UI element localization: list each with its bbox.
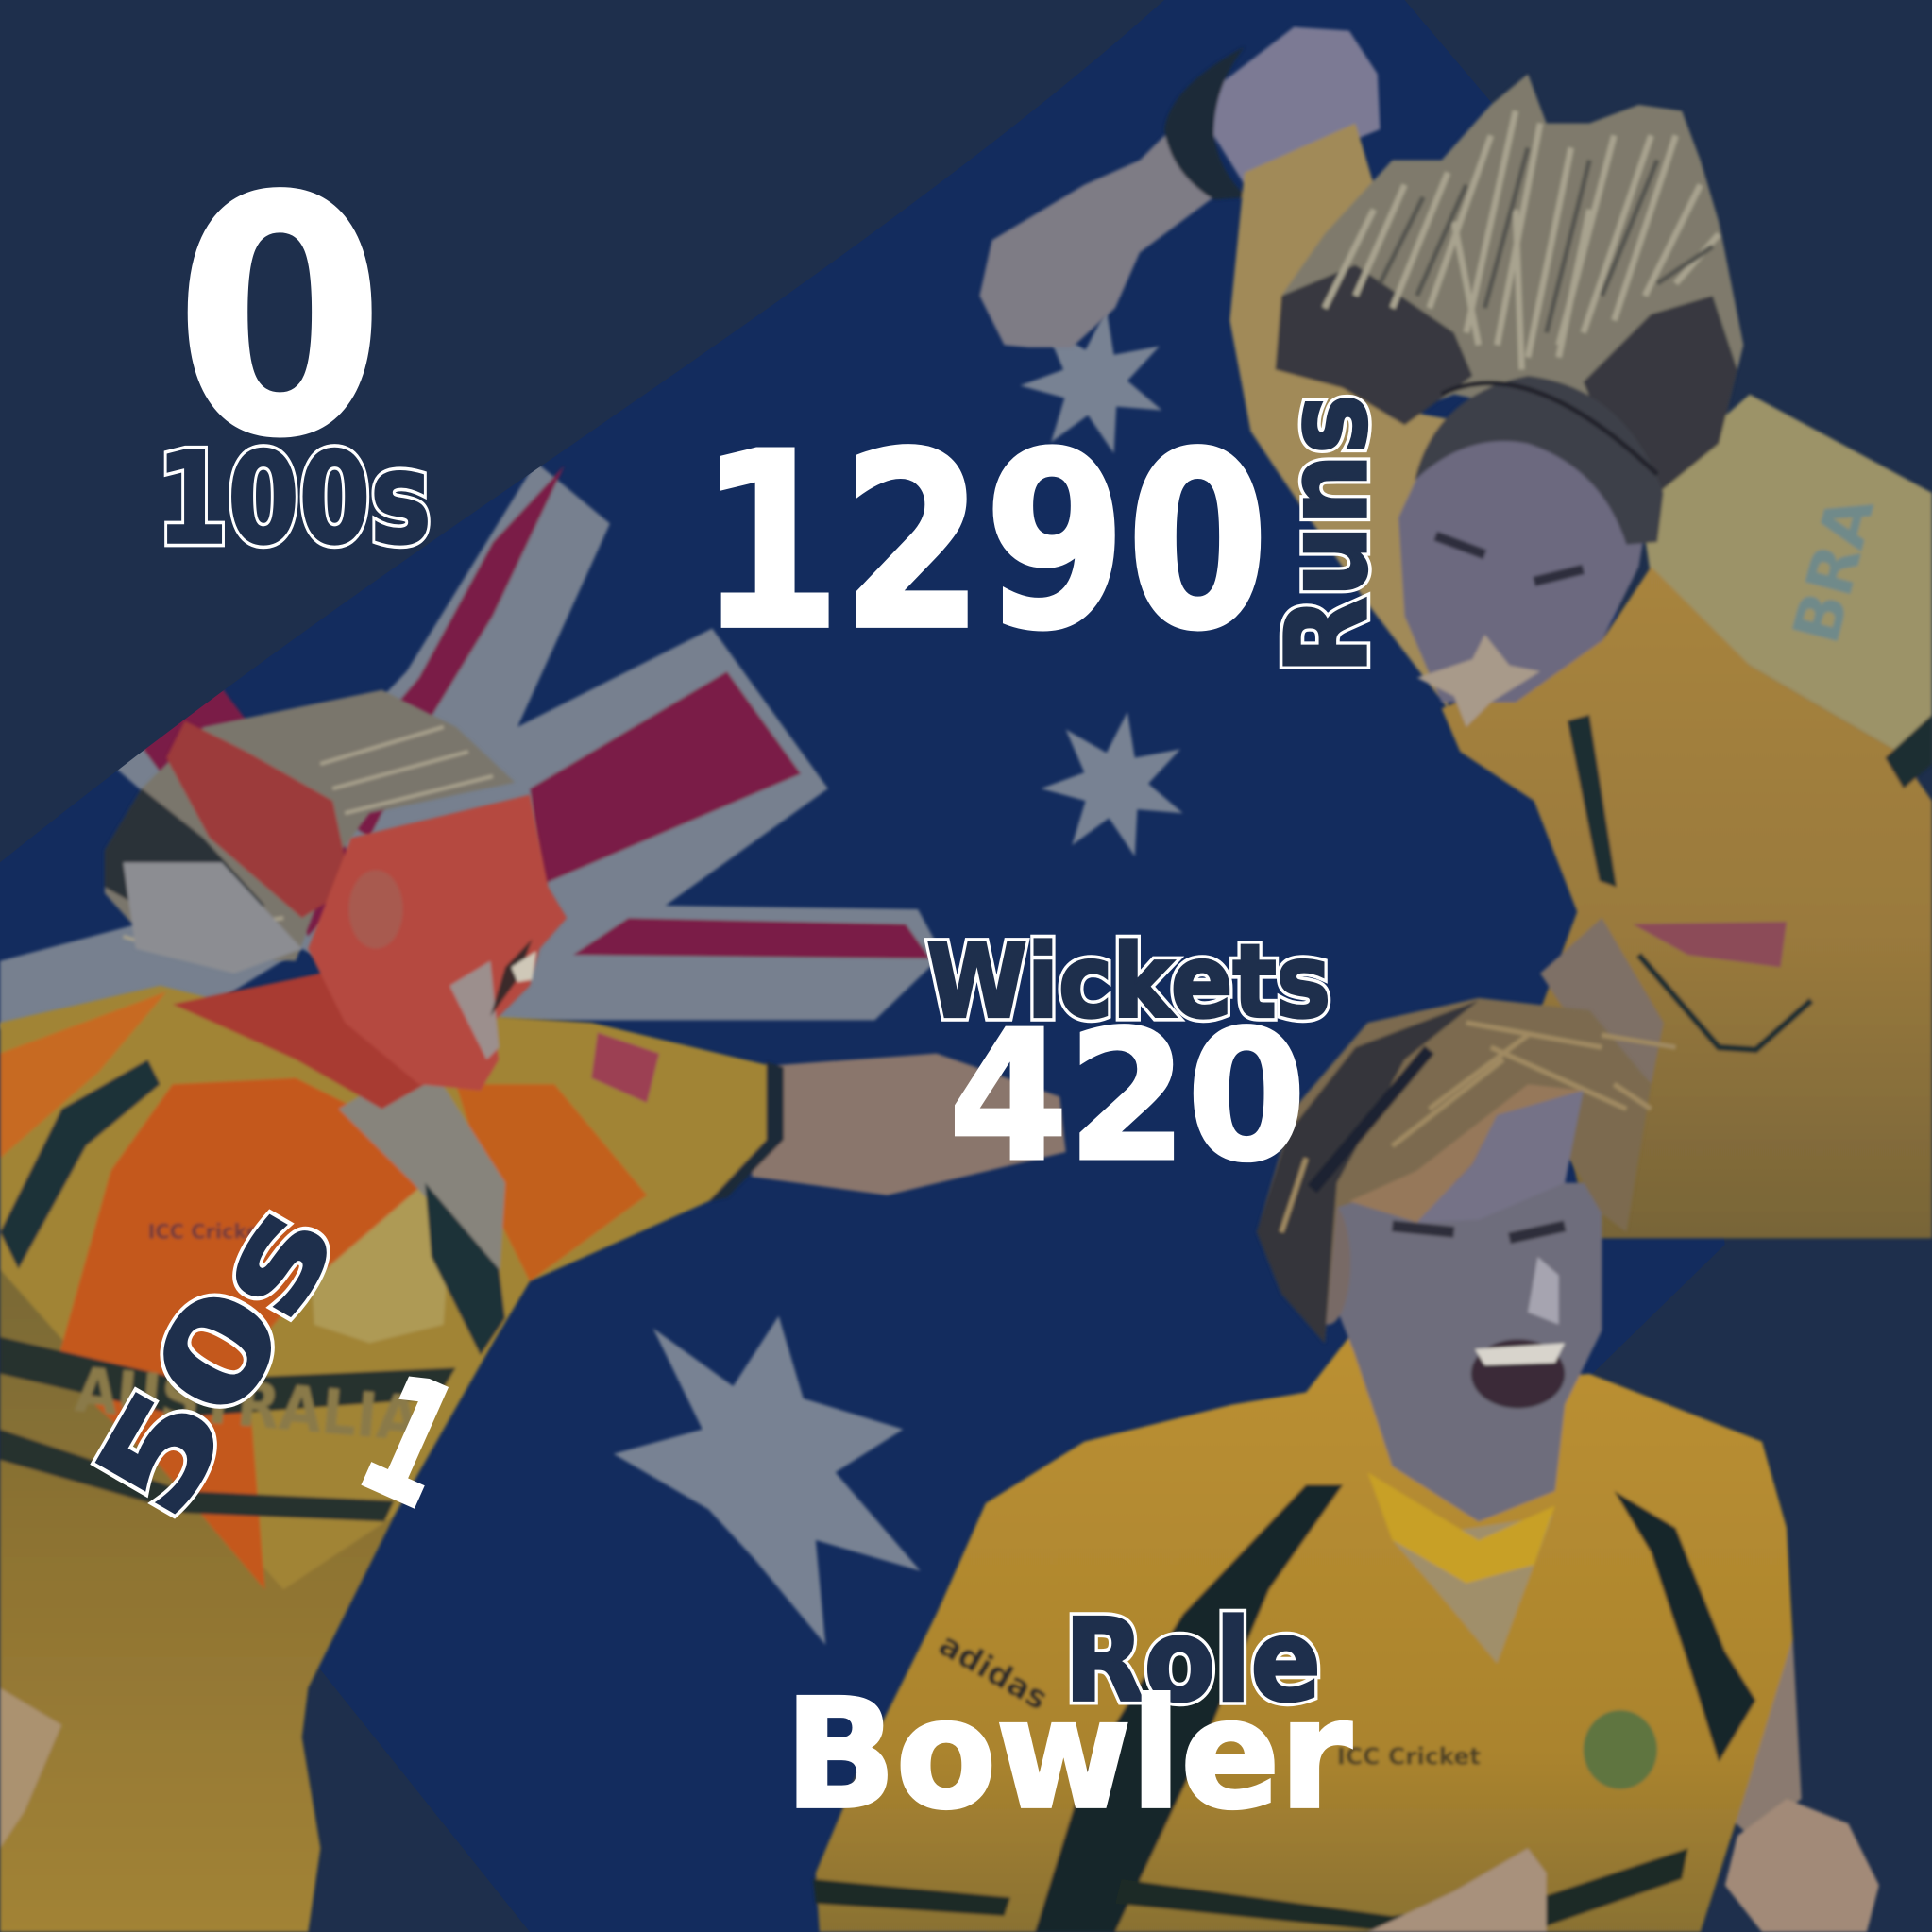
forearm and fist (979, 136, 1213, 347)
stat: wickets label: Wickets (926, 924, 1330, 1041)
face (1398, 419, 1651, 703)
shirt badge text: ICC Cricket (148, 1220, 269, 1243)
teeth (1475, 1343, 1565, 1365)
grey cross on hair (123, 862, 302, 974)
top-right player (979, 27, 1932, 1238)
shirt stripe (1568, 715, 1617, 887)
grey band over chest (339, 1058, 505, 1281)
eyes (1435, 536, 1584, 582)
stat: fifties value: 1 (335, 1337, 483, 1546)
stat: hundreds value: 0 (175, 128, 384, 509)
khaki chest (312, 1183, 449, 1343)
collar (1367, 1472, 1555, 1584)
stat: wickets value: 420 (949, 992, 1306, 1201)
ear (348, 870, 403, 949)
shirt (816, 1337, 1793, 1932)
neck (1392, 1516, 1552, 1664)
right hand (1725, 1799, 1879, 1932)
world cup mark: ICC Cricket (1337, 1743, 1481, 1771)
star through mouth (1417, 635, 1540, 727)
stat: wickets label: Wickets (926, 924, 1330, 1041)
shirt (0, 986, 779, 1932)
stat: hundreds label: 100s (157, 426, 432, 572)
role label: Role (1064, 1597, 1321, 1728)
orange left shoulder (0, 991, 166, 1159)
face (308, 795, 567, 1091)
forehead overlay (1349, 1084, 1584, 1222)
shirt stripe left (1035, 1484, 1343, 1932)
role label: Role (1064, 1597, 1321, 1728)
mouth (490, 939, 533, 1016)
face (1306, 1183, 1602, 1521)
raised arm (1201, 27, 1380, 185)
mouth patch (449, 961, 499, 1059)
hair streaks light (1325, 110, 1719, 369)
shirt lower (0, 1269, 395, 1932)
wristband (1164, 47, 1247, 199)
stat: fifties label: 50s (66, 1178, 365, 1541)
stat: runs label: Runs (1263, 395, 1392, 674)
orange chest (56, 1078, 425, 1589)
shirt back (1638, 395, 1932, 764)
hem (813, 1879, 1010, 1916)
hair dark (1257, 1001, 1479, 1343)
hair top (1415, 376, 1664, 545)
stat: runs value: 1290 (699, 400, 1269, 684)
centre hand (1367, 1848, 1547, 1932)
bottom-right player (813, 998, 1879, 1932)
flag: star small upper (1020, 310, 1161, 453)
hair strands (123, 727, 493, 955)
teeth (512, 951, 536, 982)
hair (105, 690, 515, 961)
shoulder stripes (0, 1059, 161, 1269)
hair dark (105, 788, 265, 918)
shirt stripe right (1614, 1491, 1755, 1762)
sand (0, 1688, 61, 1848)
nose (1528, 1257, 1559, 1325)
sponsor patch (1633, 922, 1787, 967)
eyes (1392, 1226, 1565, 1238)
neck (173, 974, 425, 1109)
right arm (1694, 1540, 1802, 1836)
hair (1276, 74, 1743, 499)
badge (1584, 1710, 1657, 1789)
arm patch (591, 1032, 659, 1103)
orange sleeve (456, 1084, 647, 1281)
shoulder (1229, 123, 1448, 708)
forearm (752, 1054, 1066, 1195)
shirt lettering: AUSTRALIA (73, 1354, 423, 1456)
hair strands (1281, 1023, 1676, 1232)
flag: union jack (0, 462, 942, 1059)
red hair strand (166, 720, 351, 918)
headband (1313, 1050, 1430, 1189)
sleeve band (708, 1062, 784, 1201)
left player (0, 690, 1066, 1932)
role value: Bowler (785, 1667, 1352, 1842)
stat: fifties label: 50s (66, 1178, 365, 1541)
flag: star large (614, 1316, 921, 1645)
flag: star small lower (1042, 712, 1183, 856)
shirt front (1442, 567, 1932, 1238)
stat: runs label: Runs (1263, 395, 1392, 674)
adidas mark: adidas (933, 1626, 1054, 1717)
shirt stripes (0, 1337, 456, 1417)
name on back: BRA (1779, 488, 1890, 651)
hair (1257, 998, 1651, 1343)
mouth (1471, 1339, 1565, 1408)
stat: hundreds label: 100s (157, 426, 432, 572)
hair dark right (1584, 296, 1737, 499)
ear (1306, 1201, 1350, 1325)
hair dark left (1276, 265, 1472, 425)
headband (1442, 383, 1657, 474)
hair streaks dark (1380, 148, 1713, 332)
arm fragment (1540, 918, 1664, 1084)
